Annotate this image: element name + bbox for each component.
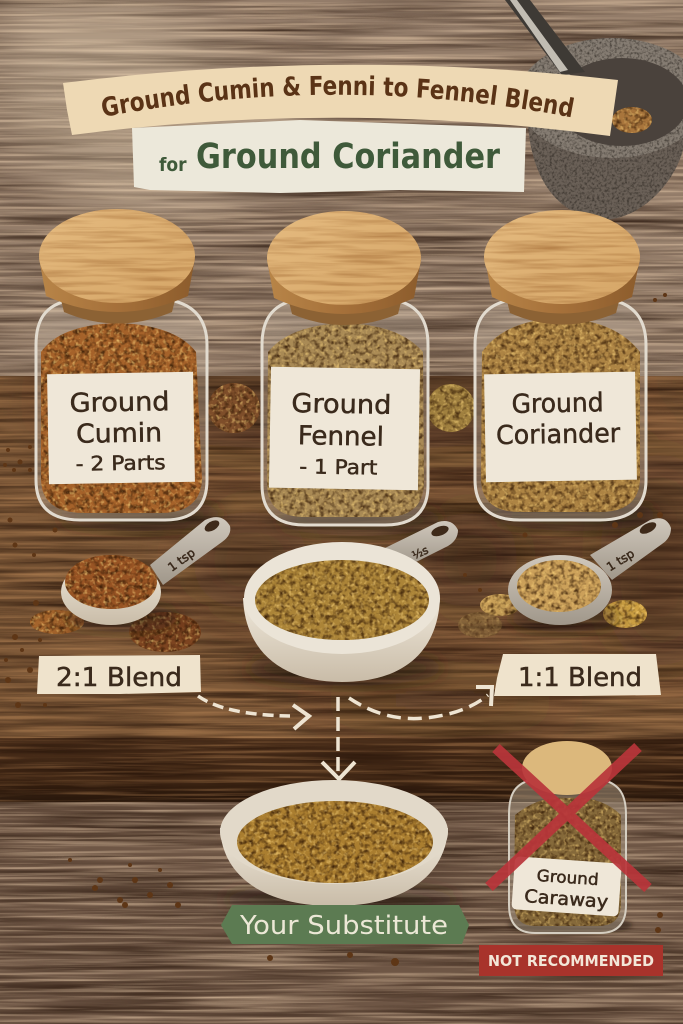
subtitle text: for xyxy=(159,154,187,176)
measuring spoon: left xyxy=(61,517,230,632)
spilled blend xyxy=(458,594,647,638)
label: Ground xyxy=(69,387,170,419)
mortar and pestle xyxy=(505,0,683,220)
cumin powder xyxy=(41,323,202,513)
label: Ground xyxy=(291,389,392,421)
red cross xyxy=(489,747,648,888)
arrow: center to 1:1 blend xyxy=(349,687,492,719)
label: 1:1 blend: 1:1 Blend xyxy=(518,663,642,693)
jar: ground coriander xyxy=(475,210,646,520)
label: Ground xyxy=(511,388,604,420)
label: Fennel xyxy=(298,421,384,453)
subtitle paper xyxy=(132,120,526,193)
caraway jar xyxy=(508,741,632,935)
label xyxy=(47,372,195,484)
caraway seeds xyxy=(514,798,621,926)
wooden lid xyxy=(39,209,195,324)
label: Coriander xyxy=(496,419,621,451)
scattered spice crumbs xyxy=(3,293,667,966)
wooden board top surface xyxy=(0,376,683,742)
arrow: 2:1 blend to center xyxy=(198,696,309,729)
label: Caraway xyxy=(524,886,609,913)
measuring spoon: center handle xyxy=(385,521,458,566)
label: - 1 Part xyxy=(299,454,378,480)
measuring spoon: center handle: ½s xyxy=(410,543,431,562)
measuring spoon: left: 1 tsp xyxy=(165,545,198,574)
label: 2:1 blend: 2:1 Blend xyxy=(56,663,182,693)
label: - 2 Parts xyxy=(75,450,166,476)
label: Cumin xyxy=(76,418,162,450)
title banner xyxy=(63,64,618,136)
wooden lid xyxy=(267,211,421,325)
label: 1:1 blend xyxy=(494,654,661,696)
spilled cumin xyxy=(30,610,201,652)
fennel powder xyxy=(267,323,424,517)
wooden lid xyxy=(522,741,612,795)
label xyxy=(484,372,637,482)
label xyxy=(269,367,420,490)
arrow: down to substitute xyxy=(322,697,355,779)
coriander powder xyxy=(481,318,640,512)
label: Ground xyxy=(536,866,599,889)
subtitle paper: Ground Coriander xyxy=(196,137,500,177)
spice patches behind jars xyxy=(208,383,475,433)
label: 2:1 blend xyxy=(37,655,201,694)
jar: ground cumin xyxy=(36,209,207,520)
board shading xyxy=(176,376,683,738)
label xyxy=(511,856,622,917)
center blend bowl xyxy=(243,542,445,686)
measuring spoon: right xyxy=(507,518,671,632)
ribbon: your substitute xyxy=(221,905,469,944)
badge: not recommended: NOT RECOMMENDED xyxy=(488,952,654,970)
substitute spice xyxy=(237,801,433,883)
title banner: Ground Cumin & Fenni to Fennel Blend xyxy=(102,75,574,118)
wooden lid xyxy=(484,210,640,324)
jar: ground fennel xyxy=(262,211,428,525)
blend spice xyxy=(255,560,429,640)
measuring spoon: right: 1 tsp xyxy=(604,546,637,574)
substitute bowl xyxy=(220,780,460,916)
badge: not recommended xyxy=(479,945,663,976)
shadows under jars xyxy=(55,499,660,536)
wooden board front edge xyxy=(0,738,683,802)
ribbon: your substitute: Your Substitute xyxy=(239,911,448,941)
